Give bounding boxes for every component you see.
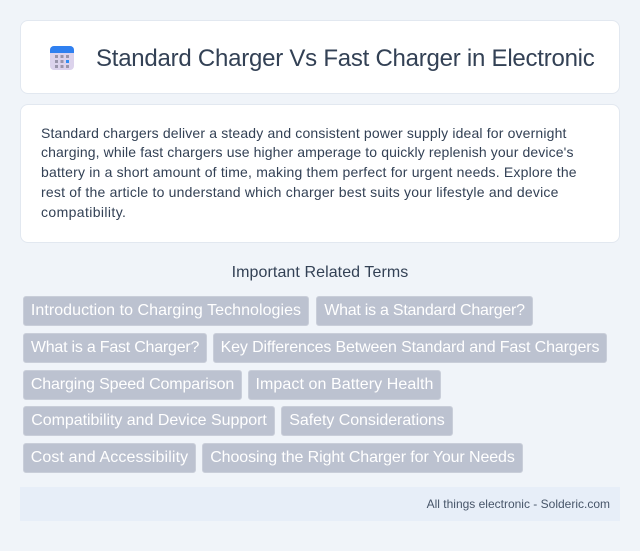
footer xyxy=(20,487,620,521)
icon: calendar app xyxy=(50,46,74,70)
tag xyxy=(23,333,207,363)
text block: intro paragraph: battery in a short amount of time, making them perfect for urgent needs. Explore the xyxy=(41,164,577,180)
tag xyxy=(213,333,607,363)
tag: Key Differences Between Standard and Fast Chargers xyxy=(221,339,599,356)
text block: intro paragraph: rest of the article to understand which charger best suits your lifestyle and device xyxy=(41,184,559,200)
tag xyxy=(316,296,533,326)
tag: What is a Fast Charger? xyxy=(31,339,199,356)
tag xyxy=(248,370,441,400)
tag: Charging Speed Comparison xyxy=(31,376,234,393)
text block: intro paragraph: compatibility. xyxy=(41,204,126,220)
heading: important related terms: Important Related Terms xyxy=(232,264,408,281)
panel: intro text card xyxy=(20,104,620,243)
tag: What is a Standard Charger? xyxy=(324,302,525,319)
tag: Cost and Accessibility xyxy=(31,449,188,466)
tag xyxy=(23,370,242,400)
panel: related term tags xyxy=(23,296,607,473)
tag xyxy=(23,296,309,326)
tag xyxy=(202,443,523,473)
footer credit: All things electronic - Solderic.com xyxy=(427,497,610,511)
text block: intro paragraph: charging, while fast chargers use higher amperage to quickly replenish your device's xyxy=(41,144,574,160)
panel: header card xyxy=(20,20,620,94)
title: Standard Charger Vs Fast Charger in Electronic xyxy=(96,45,595,72)
tag: Impact on Battery Health xyxy=(255,376,434,393)
text block: intro paragraph xyxy=(41,125,577,220)
tag: Introduction to Charging Technologies xyxy=(31,302,301,319)
text block: intro paragraph: Standard chargers deliver a steady and consistent power supply ideal for overnight xyxy=(41,125,567,141)
tag xyxy=(23,406,275,436)
tag: Choosing the Right Charger for Your Needs xyxy=(210,449,515,466)
tag: Compatibility and Device Support xyxy=(31,412,267,429)
tag: Safety Considerations xyxy=(289,412,445,429)
tag xyxy=(23,443,196,473)
tag xyxy=(281,406,453,436)
